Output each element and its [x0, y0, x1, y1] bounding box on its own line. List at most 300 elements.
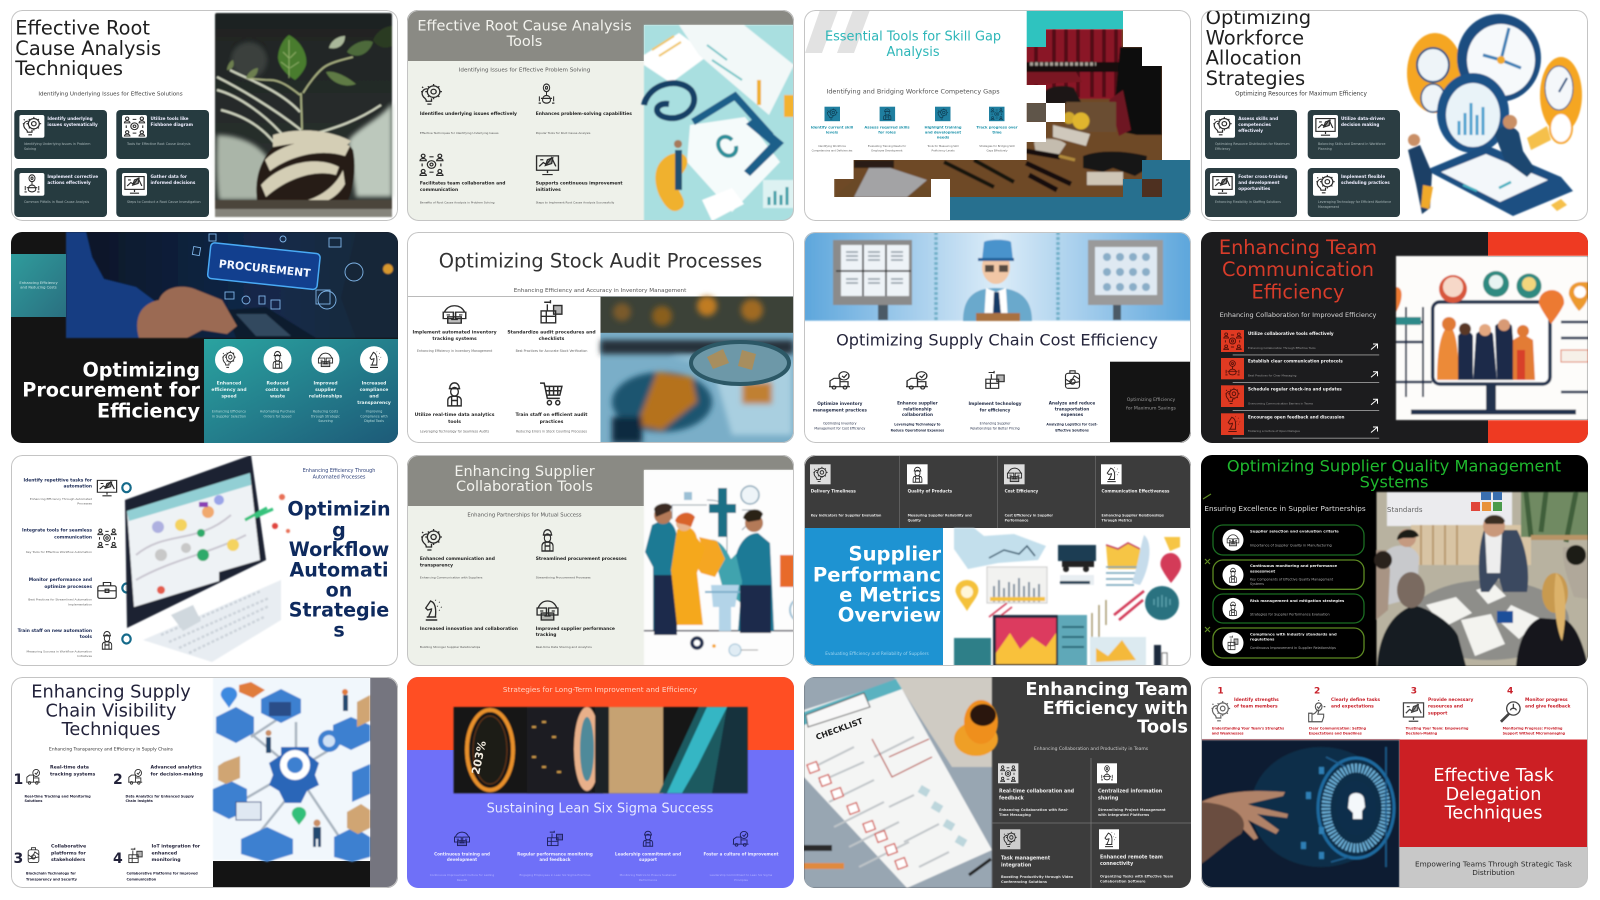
- item: identify skill levels: Identify current skill: [811, 125, 853, 129]
- item: highlight training: Proficiency Levels: [931, 149, 955, 153]
- slide card: Effective Root Cause Analysis Tools: [407, 10, 794, 221]
- image: team meeting photo: [1374, 492, 1588, 666]
- item: identify repetitive tasks: Identify repetitive tasks for: [24, 478, 93, 484]
- item: remote connectivity: connectivity: [1100, 861, 1134, 867]
- item: IoT integration: monitoring: [152, 857, 181, 863]
- item: collaborative platforms: Blockchain Technology for: [26, 872, 76, 876]
- image: isometric documents: [644, 25, 794, 221]
- panel: grey subtitle block: Distribution: [1472, 868, 1515, 877]
- item: identify repetitive tasks: automation: [64, 484, 92, 490]
- slide card: Enhancing Team Efficiency with Tools: [804, 677, 1191, 888]
- item: technology: for efficiency: [980, 407, 1011, 412]
- item: train staff: Train staff on new automation: [18, 628, 92, 634]
- title: Sustaining Lean Six Sigma Success: [487, 801, 714, 816]
- slide card: Enhancing Supply Chain Visibility Techniques: [11, 677, 398, 888]
- callout: dark tagline box: for Maximum Savings: [1126, 406, 1177, 412]
- slide card: Optimizing Supply Chain Cost Efficiency: [804, 232, 1191, 443]
- metric: communication effectiveness: Through Metrics: [1102, 518, 1132, 522]
- item: real-time data: 1: [14, 772, 23, 788]
- step 2: 2: [1314, 686, 1320, 696]
- subtitle: Automated Processes: [313, 475, 366, 481]
- item: technology: Enhancing Supplier: [980, 421, 1011, 425]
- slide card: Optimizing Procurement for Efficiency: [11, 232, 398, 443]
- pill: compliance: [1213, 628, 1364, 658]
- item: improved relationships: Sourcing: [318, 419, 333, 423]
- item: improved relationships: Improved: [313, 380, 338, 386]
- item: collaborative platforms: platforms for: [51, 850, 87, 856]
- item: reduced costs: costs and: [265, 387, 290, 393]
- callout: dark tagline box: [1110, 362, 1191, 443]
- panel: red title block: Delegation: [1446, 785, 1541, 805]
- title: Collaboration Tools: [456, 479, 593, 495]
- panel: assess skills: Optimizing Resource Distribution for Maximum: [1215, 142, 1290, 146]
- callout: dark tagline box: Optimizing Efficiency: [1127, 397, 1176, 403]
- item: monitor performance: Implementation: [68, 603, 92, 607]
- item: reduced costs: Orders for Speed: [263, 414, 292, 418]
- item: transportation expenses: expenses: [1061, 412, 1084, 417]
- step 3: 3: [1411, 686, 1417, 696]
- item: performance monitoring: and feedback: [539, 857, 571, 862]
- title: Optimizing Supply Chain Cost Efficiency: [836, 331, 1158, 350]
- panel: data-driven: [1308, 110, 1400, 159]
- item: supplier relationship: Reduce Operational Expenses: [891, 428, 944, 432]
- title: g: [332, 519, 346, 542]
- title: Automati: [289, 559, 389, 582]
- item: highlight training: and development: [925, 130, 961, 134]
- panel: blue title block: Supplier: [848, 543, 941, 566]
- title: Optimizing: [82, 359, 200, 382]
- step 4: Support Without Micromanaging: [1503, 731, 1566, 735]
- pill: continuous monitoring: Systems: [1250, 582, 1264, 586]
- subtitle: Strategies for Long-Term Improvement and Efficiency: [503, 685, 698, 694]
- item: leadership commitment: support: [639, 857, 657, 862]
- row: collaborative tools: Utilize collaborative tools effectively: [1248, 331, 1334, 336]
- title: on: [326, 579, 352, 602]
- item: automated tracking: Implement automated inventory: [413, 329, 497, 335]
- step 1: [1212, 686, 1284, 735]
- step 2: [1309, 686, 1380, 735]
- item: increased compliance: Increased: [362, 380, 386, 386]
- image: clocks and analyst illustration: [1407, 14, 1582, 216]
- slide card: Enhancing Supplier Collaboration Tools: [407, 455, 814, 666]
- item: supplier relationship: Enhance supplier: [897, 401, 939, 406]
- item: identify repetitive tasks: Enhancing Efficiency Through Automated: [30, 497, 92, 501]
- title: Procurement for: [22, 379, 201, 402]
- pill: risk management: Strategies for Supplier Performance Evaluation: [1250, 612, 1330, 616]
- item: real-time collaboration: [998, 763, 1075, 817]
- panel: utilize tools: [116, 110, 209, 159]
- item: real-time collaboration: feedback: [999, 795, 1025, 801]
- item: supports continuous improvement: Supports continuous improvement: [536, 181, 623, 187]
- item: performance monitoring: Engaging Employees in Lean Six Sigma Practices: [520, 873, 591, 877]
- block: image fragment: [1142, 179, 1162, 197]
- image: workflow on a monitor with keyboard: [125, 455, 290, 662]
- item: facilitates team collaboration: [420, 154, 505, 205]
- title: Effective Root: [15, 16, 150, 40]
- image: collage of data charts: [954, 528, 1181, 666]
- row: open feedback: Fostering a Culture of Open Dialogue: [1248, 429, 1300, 433]
- title: Communication: [1222, 258, 1374, 281]
- icon: decorative green sparks: [1203, 494, 1211, 632]
- panel: blue title block: e Metrics: [839, 584, 941, 607]
- item: real-time data: Real-time data: [50, 765, 89, 771]
- item: identify repetitive tasks: [24, 478, 131, 506]
- title: Techniques: [14, 57, 123, 80]
- item: identifies underlying issues: Effective Techniques for Identifying Underlying Issues: [420, 131, 499, 135]
- item: identify skill levels: Identifying Workforce: [818, 144, 846, 148]
- item: culture of improvement: [704, 831, 778, 882]
- row: communication protocols: Establish clear communication protocols: [1248, 359, 1343, 364]
- item: real-time collaboration: Time Messaging: [999, 813, 1031, 817]
- pill: risk management: Risk management and mitigation strategies: [1250, 598, 1345, 603]
- item: real-time data: tracking systems: [50, 772, 95, 778]
- item: leadership commitment: Leadership commitment and: [615, 851, 681, 856]
- item: centralized information: Streamlining Project Management: [1098, 808, 1166, 812]
- item: enhances problem-solving: Enhances problem-solving capabilities: [536, 111, 632, 117]
- item: enhanced efficiency: efficiency and: [211, 387, 247, 393]
- image: mosaic studio desk photo: [834, 29, 1164, 199]
- item: highlight training: needs: [937, 135, 950, 139]
- panel: flexible scheduling: scheduling practices: [1341, 180, 1390, 185]
- step 4: and give feedback: [1525, 704, 1570, 710]
- block: grey side strip: [370, 677, 398, 888]
- item: track progress: time: [992, 130, 1002, 134]
- subtitle: Enhancing Transparency and Efficiency in Supply Chains: [49, 747, 174, 753]
- metric: cost efficiency: Cost Efficiency: [1005, 489, 1039, 494]
- panel: data-driven: Planning: [1318, 147, 1332, 151]
- item: standardize procedures: checklists: [539, 336, 565, 342]
- panel: red title block: [1400, 740, 1588, 847]
- item: standardize procedures: Standardize audit procedures and: [507, 329, 596, 335]
- item: identifies underlying issues: Identifies underlying issues effectively: [420, 111, 517, 117]
- title: Cause Analysis: [15, 37, 161, 60]
- item: identify repetitive tasks: Processes: [77, 502, 92, 506]
- item: automated tracking: [413, 306, 497, 353]
- panel: assess skills: Efficiency: [1215, 147, 1230, 151]
- panel: data-driven: Balancing Skills and Demand in Workforce: [1318, 142, 1385, 146]
- panel: gather data: Steps to Conduct a Root Cause Investigation: [127, 200, 201, 204]
- item: real-time data: Solutions: [24, 799, 42, 803]
- item: real-time analytics: Utilize real-time data analytics: [415, 412, 495, 418]
- callout: teal subtitle box: and Reducing Costs: [20, 286, 57, 290]
- item: performance monitoring: Regular performance monitoring: [517, 851, 593, 856]
- item: supports continuous improvement: initiatives: [536, 187, 561, 193]
- item: IoT integration: Collaborative Platforms for Improved: [126, 872, 198, 876]
- title: Efficiency: [1252, 281, 1344, 304]
- panel: blue title block: Evaluating Efficiency and Reliability of Suppliers: [825, 651, 929, 657]
- panel: identify underlying issues: Solving: [24, 147, 36, 151]
- item: train staff: tools: [80, 634, 92, 640]
- image: manager between two boards: [804, 232, 1191, 321]
- row: communication protocols: Best Practices for Clear Messaging: [1248, 374, 1297, 378]
- panel: implement corrective actions: actions effectively: [47, 180, 91, 185]
- item: transportation expenses: Effective Solutions: [1055, 428, 1089, 432]
- item: train staff: [516, 383, 588, 434]
- title: Efficiency with: [1043, 698, 1188, 719]
- title: Tools: [1137, 717, 1188, 738]
- image: plant with roots: [215, 13, 392, 217]
- title: s: [333, 619, 345, 642]
- item: highlight training: [925, 107, 962, 153]
- item: culture of improvement: Foster a culture of improvement: [704, 851, 778, 856]
- item: centralized information: sharing: [1098, 795, 1119, 801]
- item: procurement processes: Streamlined procurement processes: [536, 556, 627, 562]
- item: advanced analytics: Data Analytics for Enhanced Supply: [126, 794, 195, 798]
- slide card: Sustaining Lean Six Sigma Success: [407, 677, 794, 888]
- item: collaborative platforms: 3: [14, 851, 23, 867]
- item: inventory management: Optimize inventory: [817, 401, 863, 406]
- item: performance tracking: Improved supplier performance: [536, 626, 615, 632]
- item: reduced costs: Automating Purchase: [260, 410, 295, 414]
- slide card: Effective Task Delegation Techniques: [1201, 677, 1588, 888]
- step 4: Monitoring Progress: Providing: [1503, 726, 1563, 730]
- item: transportation expenses: Analyzing Logistics for Cost-: [1046, 422, 1098, 426]
- item: continuous training: [430, 832, 494, 882]
- subtitle: Ensuring Excellence in Supplier Partnerships: [1204, 504, 1366, 513]
- metric: delivery timeliness: Delivery Timeliness: [811, 489, 856, 494]
- panel: grey subtitle block: [1400, 847, 1588, 888]
- title: Optimizing: [1206, 6, 1311, 29]
- step 2: Clear Communication: Setting: [1309, 726, 1367, 730]
- panel: identify underlying issues: issues systematically: [47, 122, 98, 127]
- panel: assess skills: Assess skills and: [1238, 116, 1278, 121]
- item: increased compliance: Digital Tools: [364, 419, 384, 423]
- image: laptop with procurement panel: PROCUREMENT: [218, 257, 312, 280]
- pill: compliance: Continuous Improvement in Supplier Relationships: [1250, 646, 1336, 650]
- panel: identify underlying issues: [14, 110, 107, 159]
- image: checklist on desk: [804, 677, 998, 888]
- title: Strategie: [289, 599, 389, 622]
- item: track progress: Track progress over: [976, 125, 1018, 129]
- pill: supplier selection: Supplier selection and evaluation criteria: [1250, 529, 1339, 534]
- panel: gather data: informed decisions: [150, 180, 196, 185]
- item: remote connectivity: Collaboration Software: [1100, 879, 1146, 883]
- subtitle: Enhancing Partnerships for Mutual Success: [467, 513, 582, 519]
- panel: implement corrective actions: [14, 168, 107, 217]
- item: task management: integration: [1001, 862, 1032, 868]
- item: technology: [968, 371, 1022, 430]
- step 2: Clearly define tasks: [1331, 697, 1380, 703]
- metric: quality of products: Quality of Products: [908, 489, 953, 494]
- item: supports continuous improvement: [536, 156, 623, 205]
- panel: assess skills: [1205, 110, 1297, 159]
- item: improved relationships: through Strategic: [311, 414, 340, 418]
- item: technology: Implement technology: [968, 401, 1022, 406]
- row: check-ins: Schedule regular check-ins and updates: [1248, 387, 1342, 392]
- step 1: and Weaknesses: [1212, 731, 1244, 735]
- callout: teal subtitle box: Enhancing Efficiency: [19, 281, 58, 285]
- panel: identify underlying issues: Identifying Underlying Issues in Problem: [24, 142, 90, 146]
- image: glowing gauges and analyst: 203%: [469, 740, 489, 776]
- slide card: Optimizing Workforce Allocation Strategies: [1201, 6, 1588, 221]
- item: leadership commitment: Monitoring Metrics to Ensure Sustained: [620, 873, 677, 877]
- item: train staff: [18, 628, 131, 658]
- subtitle: Enhancing Collaboration and Productivity in Teams: [1034, 746, 1149, 752]
- item: supplier relationship: relationship: [903, 406, 932, 411]
- item: real-time collaboration: Enhancing Collaboration with Real-: [999, 808, 1069, 812]
- item: collaborative platforms: [14, 843, 87, 881]
- image: partners joining puzzle pieces: [644, 470, 814, 666]
- step 3: support: [1428, 710, 1447, 716]
- item: continuous training: development: [447, 857, 477, 862]
- item: track progress: [976, 107, 1018, 153]
- item: communication and transparency: Enhanced communication and: [420, 556, 495, 562]
- panel: blue title block: Overview: [838, 604, 941, 627]
- title: Efficiency: [97, 399, 200, 422]
- panel: implement corrective actions: Common Pitfalls in Root Cause Analysis: [24, 200, 89, 204]
- item: supplier relationship: [891, 372, 944, 432]
- title: Allocation: [1206, 46, 1302, 69]
- item: task management: Task management: [1001, 855, 1051, 861]
- image: laptop with procurement panel: [66, 232, 398, 338]
- panel: identify underlying issues: Identify underlying: [47, 116, 93, 121]
- item: remote connectivity: Organizing Tasks with Effective Team: [1100, 874, 1174, 878]
- item: collaborative platforms: stakeholders: [51, 857, 85, 863]
- item: automated tracking: Enhancing Efficiency in Inventory Management: [417, 349, 493, 353]
- panel: red title block: Techniques: [1444, 803, 1542, 823]
- pill: continuous monitoring: Continuous monitoring and performance: [1250, 563, 1337, 568]
- item: train staff: Train staff on efficient audit: [516, 412, 588, 418]
- step 2: and expectations: [1331, 704, 1374, 710]
- image: team meeting photo: Standards: [1387, 506, 1423, 514]
- row: check-ins: [1221, 385, 1379, 411]
- panel: foster cross-training: Enhancing Flexibility in Staffing Solutions: [1215, 200, 1281, 204]
- subtitle: Optimizing Resources for Maximum Efficiency: [1235, 92, 1367, 98]
- item: innovation and collaboration: Increased innovation and collaboration: [420, 626, 518, 632]
- item: remote connectivity: [1099, 829, 1174, 883]
- slide card: Enhancing Team Communication Efficiency: [1201, 232, 1588, 443]
- item: monitor performance: [28, 577, 131, 607]
- item: reduced costs: Reduced: [267, 380, 288, 386]
- item: continuous training: Continuous Improvement Culture for Lasting: [430, 873, 494, 877]
- item: transportation expenses: transportation: [1055, 406, 1089, 411]
- item: assess required skills: Assess required skills: [864, 125, 910, 129]
- title: Enhancing Team: [1219, 236, 1377, 259]
- item: supplier relationship: collaboration: [902, 412, 933, 417]
- title: Techniques: [61, 719, 160, 740]
- item: identify skill levels: [811, 107, 853, 153]
- item: identify skill levels: levels: [826, 130, 839, 134]
- item: increased compliance: and: [369, 394, 379, 400]
- metric: delivery timeliness: Key Indicators for Supplier Evaluation: [811, 514, 882, 518]
- title: Optimizin: [287, 498, 391, 521]
- item: IoT integration: [113, 843, 201, 881]
- item: task management: [1000, 829, 1074, 884]
- item: performance tracking: tracking: [536, 632, 556, 638]
- item: technology: Relationships for Better Pricing: [970, 426, 1020, 430]
- panel: utilize tools: Fishbone diagram: [150, 122, 194, 127]
- title: Workforce: [1206, 26, 1304, 49]
- row: open feedback: [1221, 413, 1379, 438]
- panel: gather data: Gather data for: [150, 174, 188, 179]
- item: enhanced efficiency: Enhancing Efficiency: [212, 410, 246, 414]
- item: culture of improvement: Principles: [734, 878, 748, 882]
- panel: foster cross-training: Foster cross-training: [1238, 174, 1288, 179]
- item: increased compliance: transparency: [357, 400, 391, 406]
- block: red accents: [1488, 232, 1588, 443]
- panel: data-driven: decision making: [1341, 122, 1379, 127]
- item: advanced analytics: for decision-making: [150, 772, 203, 778]
- item: increased compliance: Improving: [366, 410, 382, 414]
- panel: metric columns: [804, 455, 1191, 528]
- item: enhances problem-solving: [536, 84, 632, 135]
- image: checklist on desk: CHECKLIST: [815, 716, 865, 742]
- step 1: of team members: [1234, 704, 1278, 710]
- slide card: Supplier Performance Metrics Overview: [804, 455, 1191, 666]
- item: train staff: Reducing Errors in Stock Counting Processes: [516, 430, 587, 434]
- item: real-time collaboration: Real-time collaboration and: [999, 789, 1075, 795]
- item: IoT integration: IoT integration for: [152, 843, 201, 849]
- item: IoT integration: Communication: [126, 877, 157, 881]
- metric: communication effectiveness: Communication Effectiveness: [1102, 489, 1170, 494]
- step 4: 4: [1507, 686, 1513, 696]
- panel: utilize tools: Utilize tools like: [150, 116, 189, 121]
- panel: flexible scheduling: Management: [1318, 205, 1340, 209]
- row: open feedback: Encourage open feedback and discussion: [1248, 414, 1344, 419]
- step 4: [1501, 686, 1570, 735]
- slide card: Essential Tools for Skill Gap Analysis: [804, 10, 1191, 221]
- item: communication and transparency: [420, 529, 495, 580]
- panel: assess skills: competencies: [1238, 122, 1271, 127]
- icon: quotation marks: [805, 10, 870, 53]
- item: enhanced efficiency: speed: [221, 394, 237, 400]
- item: collaborative platforms: Collaborative: [51, 843, 86, 849]
- item: culture of improvement: Leadership Commitment to Lean Six Sigma: [710, 873, 773, 877]
- step 1: 1: [1217, 686, 1224, 696]
- item: integrate tools: Integrate tools for seamless: [22, 528, 92, 534]
- title: Enhancing Supply: [31, 681, 191, 702]
- item: enhanced efficiency: [211, 346, 247, 418]
- item: train staff: practices: [540, 419, 564, 425]
- item: reduced costs: waste: [270, 394, 285, 400]
- item: centralized information: [1097, 763, 1166, 817]
- item: identifies underlying issues: [420, 84, 517, 135]
- step 3: [1403, 686, 1473, 735]
- item: transportation expenses: [1046, 371, 1098, 432]
- panel: grey subtitle block: Empowering Teams Through Strategic Task: [1415, 860, 1573, 869]
- block: teal accent top: [1027, 10, 1123, 47]
- subtitle: Enhancing Collaboration for Improved Efficiency: [1220, 311, 1377, 319]
- metric: cost efficiency: [1004, 464, 1053, 522]
- image: isometric logistics network: [213, 677, 370, 862]
- row: check-ins: Overcoming Communication Barriers in Teams: [1248, 401, 1313, 405]
- item: assess required skills: for roles: [878, 130, 897, 134]
- metric: cost efficiency: Cost Efficiency in Supplier: [1005, 514, 1053, 518]
- panel: foster cross-training: and development: [1238, 180, 1279, 185]
- pill: continuous monitoring: [1213, 560, 1364, 589]
- item: identify skill levels: Competencies and Deficiencies: [812, 149, 853, 153]
- metric: communication effectiveness: Enhancing Supplier Relationships: [1102, 514, 1164, 518]
- item: enhanced efficiency: in Supplier Selection: [212, 414, 246, 418]
- item: highlight training: Highlight training: [925, 125, 962, 129]
- subtitle: Identifying Issues for Effective Problem Solving: [459, 68, 591, 74]
- item: real-time analytics: [415, 383, 495, 434]
- item: integrate tools: Key Tools for Effective Workflow Automation: [26, 550, 92, 554]
- panel: flexible scheduling: Implement flexible: [1341, 174, 1385, 179]
- step 3: Trusting Your Team: Empowering: [1406, 726, 1469, 730]
- metric: delivery timeliness: [810, 464, 882, 518]
- item: task management: Conferencing Solutions: [1001, 880, 1047, 884]
- item: facilitates team collaboration: Facilitates team collaboration and: [420, 181, 505, 187]
- panel: blue title block: [804, 528, 943, 666]
- item: track progress: Strategies for Bridging Skill: [979, 144, 1015, 148]
- item: integrate tools: communication: [54, 534, 92, 540]
- image: magnifier over map: [600, 296, 794, 443]
- block: blue accent bottom: [950, 160, 1191, 221]
- item: continuous training: Results: [457, 878, 468, 882]
- pill: compliance: Compliance with industry standards and: [1250, 631, 1337, 636]
- item: improved relationships: relationships: [309, 394, 342, 400]
